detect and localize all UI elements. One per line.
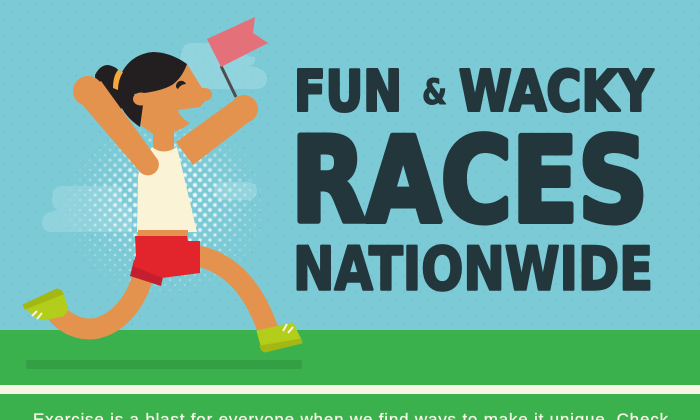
neck [153,128,174,152]
shorts back panel [130,260,163,286]
back shoe [23,289,68,320]
cloud: right [214,182,257,200]
title line: WACKY: WACKY [459,60,654,124]
halftone burst [69,124,264,296]
eye [176,81,186,89]
title line: FUN: FUN [294,60,402,124]
flag pole [221,66,236,97]
raised arm right [176,95,258,165]
title [291,60,654,304]
ponytail [95,65,132,113]
runner shadow [26,360,302,369]
title ampersand: & [422,73,447,113]
sky dot pattern [0,0,700,332]
shorts [133,236,200,278]
hair [118,52,187,127]
flag [207,17,268,67]
hair tie [113,70,123,90]
cloud: behind flag [180,43,267,89]
front leg [198,256,268,330]
track line [0,385,700,394]
waist [138,230,188,237]
face [136,64,212,134]
cloud: left [42,186,132,232]
ground [0,330,700,420]
runner [23,17,302,352]
raised arm left [73,76,159,175]
back leg [55,276,143,329]
tank top [137,147,197,232]
ear [133,92,149,106]
front shoe [257,323,302,352]
sky background [0,0,700,332]
